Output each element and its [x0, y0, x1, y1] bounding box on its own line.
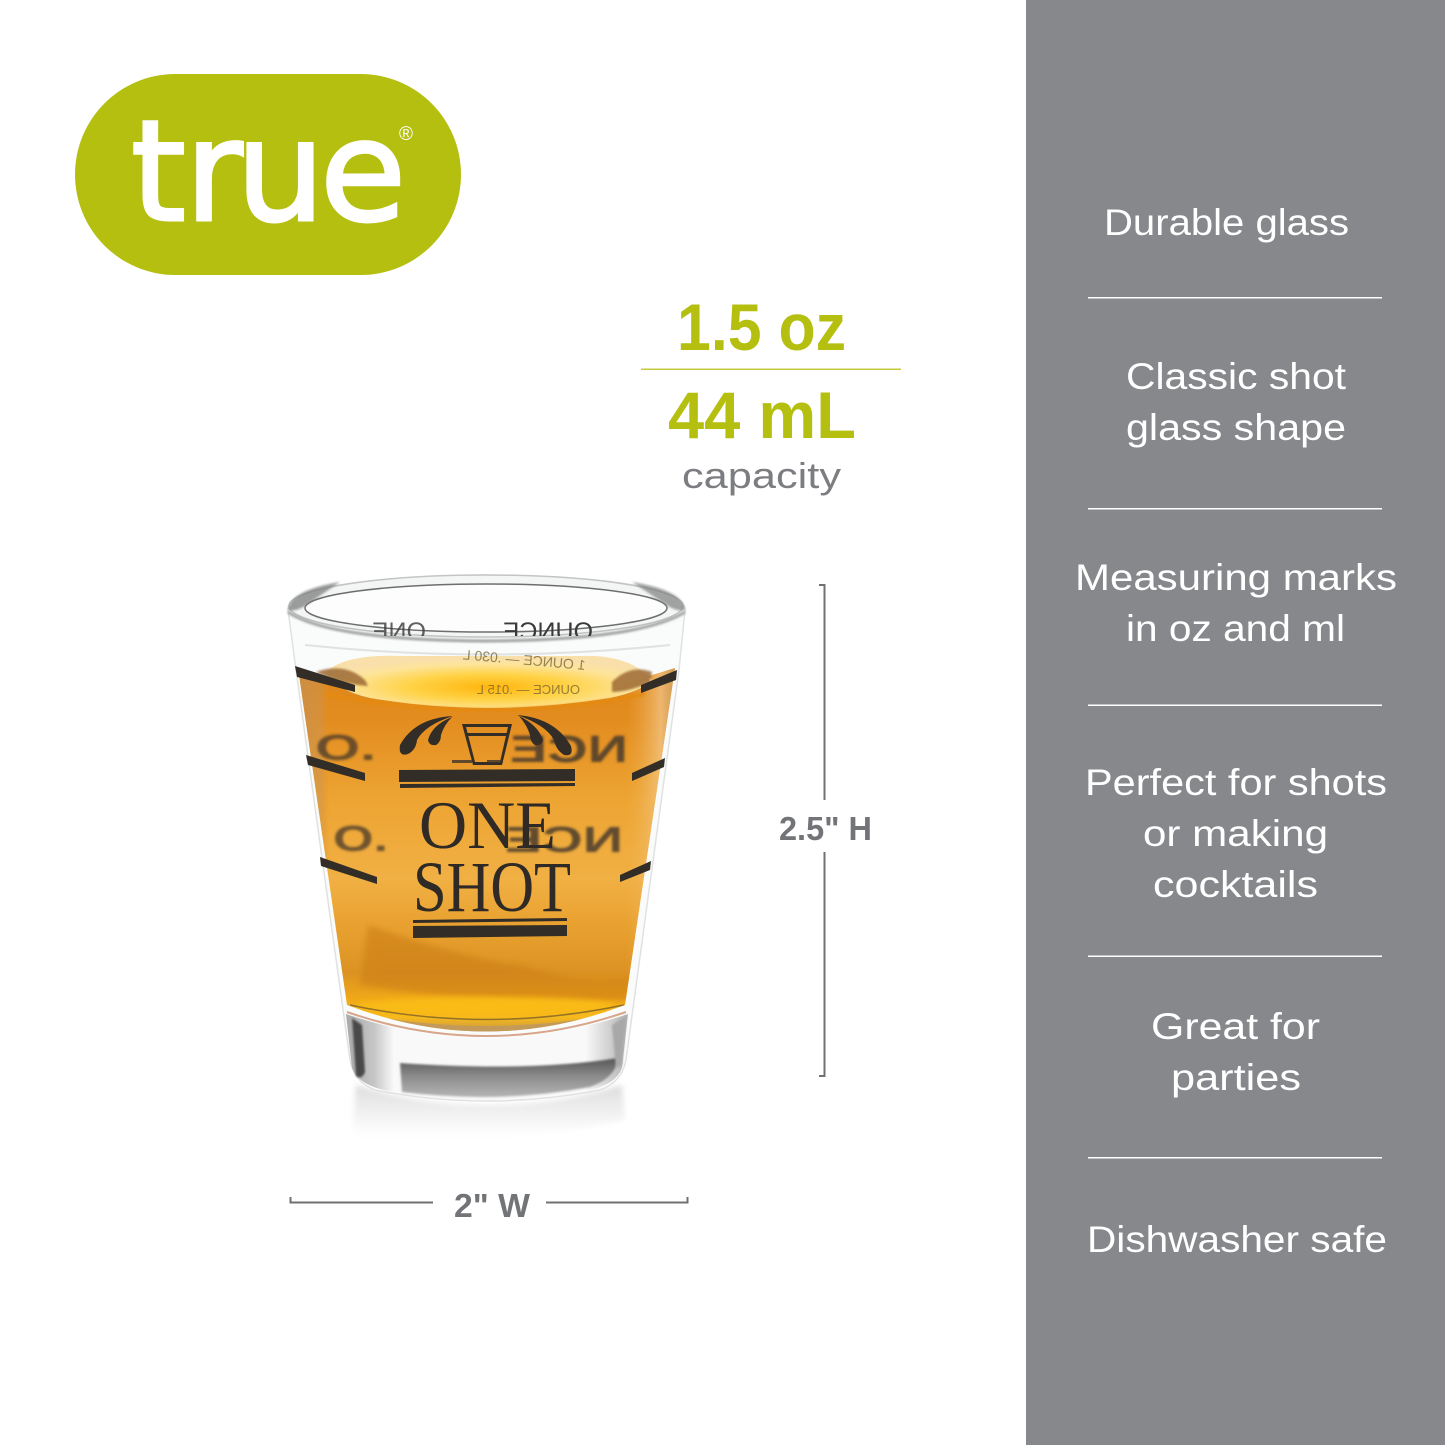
height dimension	[779, 585, 872, 1076]
printed upper bars	[399, 769, 575, 788]
logo: true: true	[131, 91, 406, 254]
feature: classic shape	[1126, 356, 1347, 448]
panel: features	[1026, 0, 1445, 1445]
width dimension: 2" W	[454, 1187, 531, 1224]
feature: durable glass: Durable glass	[1104, 202, 1349, 243]
shot glass illustration: OUNCE — .015 L	[477, 682, 580, 697]
mirrored ounce text at rim	[373, 622, 592, 636]
capacity callout	[641, 290, 901, 496]
bright top of liquid	[326, 656, 652, 708]
feature: measuring marks: Measuring marks	[1075, 557, 1397, 598]
capacity label: capacity	[682, 455, 841, 496]
top measuring band left	[295, 666, 355, 692]
top measuring band right	[641, 670, 677, 693]
capacity in ounces: 1.5 oz	[677, 290, 846, 364]
liquid	[298, 668, 675, 1032]
rim outer highlight	[289, 575, 683, 637]
measuring mark right 1	[632, 758, 665, 781]
feature: parties: Great for	[1151, 1006, 1320, 1047]
width dimension	[290, 1187, 688, 1224]
liquid base band	[391, 1019, 581, 1032]
printed lower bars	[413, 918, 567, 938]
speckled meniscus left	[316, 668, 368, 686]
reflection under glass	[352, 1085, 625, 1144]
rim inner	[305, 584, 667, 632]
mirrored back text lower: .O	[333, 818, 388, 859]
mirrored back text upper: NCE	[510, 729, 628, 771]
feature: shots or cocktails: or making	[1143, 813, 1328, 854]
feature: parties: parties	[1171, 1057, 1301, 1098]
feature: classic shape: Classic shot	[1126, 356, 1347, 397]
mirrored scale text in liquid top: 1 OUNCE — .030 L	[462, 646, 586, 673]
base glass	[346, 1014, 628, 1100]
mirrored ounce text at rim: ONE	[372, 618, 426, 646]
warm glow at liquid bottom	[356, 997, 616, 1015]
mirrored back text upper	[315, 729, 628, 771]
feature: dishwasher safe: Dishwasher safe	[1087, 1219, 1387, 1260]
feature: measuring marks	[1075, 557, 1397, 649]
mirrored back text upper: .O	[315, 729, 376, 768]
mirrored ounce text at rim: OUNCE	[503, 618, 593, 646]
height dimension: 2.5" H	[779, 810, 872, 847]
feature: parties	[1151, 1006, 1320, 1098]
liquid side shading	[299, 668, 675, 938]
feature: measuring marks: in oz and ml	[1126, 608, 1345, 649]
logo: true	[75, 74, 461, 275]
glass body	[288, 575, 685, 1101]
dark base band	[400, 1058, 618, 1097]
lower dark patch	[360, 925, 640, 1001]
printed SHOT: SHOT	[413, 847, 571, 927]
feature: shots or cocktails	[1085, 762, 1387, 905]
measuring mark right 2	[620, 861, 651, 882]
mirrored back text lower	[333, 818, 623, 860]
base side strips	[352, 1018, 365, 1077]
measuring mark left 1	[306, 755, 365, 781]
mirrored back text lower: NCE	[505, 819, 623, 860]
feature: shots or cocktails: cocktails	[1153, 864, 1318, 905]
feature: classic shape: glass shape	[1126, 407, 1346, 448]
printed cup icon with drops	[400, 715, 572, 765]
measuring mark left 2	[320, 857, 377, 884]
rim highlights	[288, 582, 340, 610]
orange meniscus	[325, 694, 645, 710]
speckled meniscus right	[612, 670, 652, 692]
feature: shots or cocktails: Perfect for shots	[1085, 762, 1387, 803]
liquid bottom edge	[347, 1012, 626, 1036]
shot glass illustration	[288, 575, 685, 1144]
printed ONE: ONE	[419, 787, 556, 863]
logo: true: ®	[399, 124, 413, 145]
capacity in millilitres: 44 mL	[668, 378, 856, 452]
